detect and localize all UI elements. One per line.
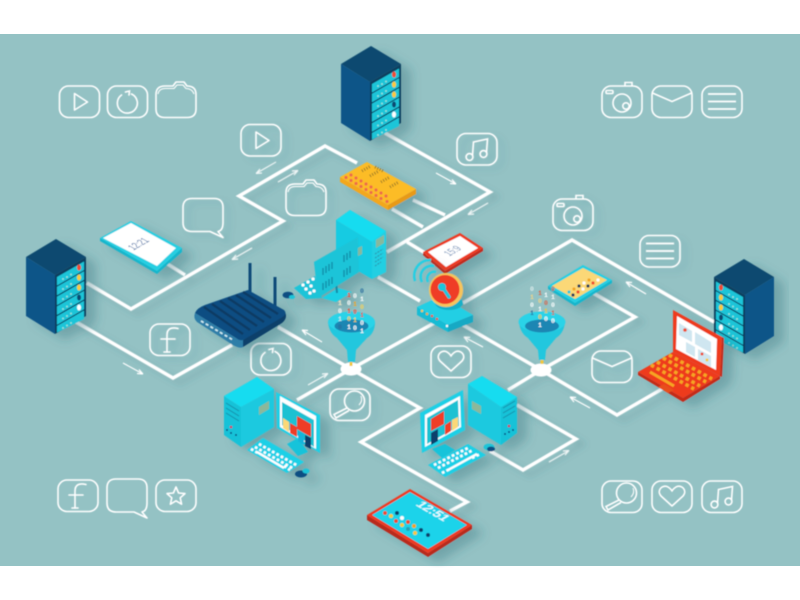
yellow network switch: [340, 162, 416, 210]
floating icon: play: [241, 124, 281, 156]
security router with key badge and wifi: [414, 260, 473, 332]
data bits: 1: [360, 296, 364, 303]
data bits: 0: [347, 316, 351, 323]
smartphone with clock: [100, 221, 182, 274]
right desktop computer: [420, 376, 517, 477]
data bits: 1: [360, 328, 364, 335]
tower: [224, 377, 274, 447]
data bits: 1: [538, 306, 542, 313]
server rack: right: [714, 259, 774, 354]
data bits: 0: [530, 302, 534, 309]
data bits: [338, 288, 364, 335]
red phone: [423, 233, 483, 274]
monitor back: [314, 237, 362, 298]
data bits: 0: [360, 320, 364, 327]
white network connection lines: [76, 133, 714, 511]
data bits: 0: [538, 314, 542, 321]
stand: [432, 444, 455, 458]
data bits: 0: [353, 309, 357, 316]
icon row: bottom left: [58, 479, 196, 518]
data bits: 1: [530, 294, 534, 301]
yellow tablet: [548, 265, 612, 306]
phone time text: 15:9: [441, 244, 465, 258]
stand: [287, 438, 308, 456]
data bits: 1: [551, 310, 555, 317]
data bits: 0: [551, 286, 555, 293]
data bits: 1: [544, 308, 548, 315]
icon row: top left: [60, 82, 196, 118]
data bits: 0: [551, 302, 555, 309]
data bits: 1: [347, 308, 351, 315]
floating icon: refresh: [251, 344, 291, 375]
router base: [417, 296, 473, 332]
data bits: 0: [338, 308, 342, 315]
data bits: 0: [544, 316, 548, 323]
key badge: [429, 273, 463, 310]
back-view desktop computer with tower: [282, 210, 386, 302]
data bits: 1: [360, 312, 364, 319]
floating icon: facebook f: [150, 324, 190, 356]
junction hub right: [530, 364, 552, 376]
keyboard: [247, 438, 304, 473]
left desktop computer: [224, 377, 320, 478]
floating icon: search: [330, 389, 370, 420]
server rack: left: [26, 239, 86, 334]
icon row: top right: [602, 82, 742, 118]
red laptop: [638, 310, 724, 402]
data bits: 0: [530, 286, 534, 293]
blue wifi router with antennas: [194, 263, 286, 348]
data bits: 1: [353, 317, 357, 324]
monitor stand: [322, 281, 352, 302]
floating icon: menu lines: [640, 236, 680, 267]
data bits: 1: [347, 324, 351, 331]
base and keyboard: [638, 352, 720, 402]
keyboard: [428, 444, 486, 477]
wifi arcs: [414, 260, 436, 282]
floating icon: speech bubble: [183, 198, 223, 238]
floating icon: envelope: [592, 351, 632, 382]
monitor: [276, 392, 320, 453]
illustration group: [26, 46, 774, 557]
mouse: [282, 292, 295, 299]
screen: [673, 310, 724, 377]
data bits: 0: [551, 318, 555, 325]
floating icon: heart: [431, 346, 471, 378]
data bits: 0: [347, 300, 351, 307]
keyboard behind: [294, 276, 322, 299]
data bits: 0: [338, 324, 342, 331]
monitor: [420, 390, 465, 453]
server rack: top: [341, 46, 401, 141]
data bits: [530, 286, 555, 329]
data bits: 0: [544, 300, 548, 307]
tower: [468, 376, 517, 445]
tower: [336, 210, 386, 279]
clock text: 12:21: [125, 236, 153, 252]
data bits: 1: [338, 300, 342, 307]
data bits: 0: [360, 288, 364, 295]
data bits: 1: [338, 316, 342, 323]
mouse: [484, 444, 495, 451]
data funnel: right: [518, 286, 566, 364]
data funnel: left: [328, 288, 375, 366]
tablet time text: 12:51: [412, 499, 454, 523]
red tablet with cyan screen: [367, 489, 472, 557]
flow arrows: [123, 162, 646, 462]
data bits: 1: [530, 310, 534, 317]
data bits: 1: [544, 292, 548, 299]
data bits: 0: [353, 293, 357, 300]
data bits: 1: [347, 292, 351, 299]
floating icon: music: [457, 134, 497, 165]
data bits: 1: [551, 294, 555, 301]
floating icon: folder: [286, 180, 326, 216]
data bits: 1: [538, 322, 542, 329]
icon row: bottom right: [602, 481, 742, 512]
data bits: 0: [360, 304, 364, 311]
floating icon: camera: [553, 196, 593, 230]
data bits: 0: [538, 298, 542, 305]
data bits: 0: [353, 325, 357, 332]
data bits: 1: [538, 290, 542, 297]
junction hub left: [340, 362, 362, 376]
data bits: 1: [353, 301, 357, 308]
mouse: [295, 468, 310, 478]
